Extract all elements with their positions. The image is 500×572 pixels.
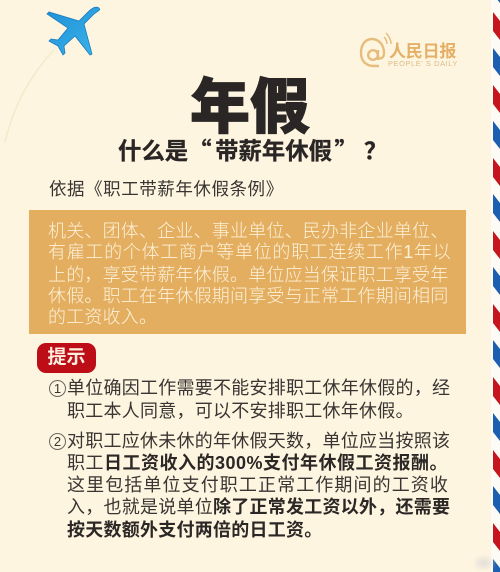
legal basis line: 依据《职工带薪年休假条例》 <box>49 179 284 199</box>
logo: People's Daily <box>360 32 458 68</box>
badge: tip <box>37 343 96 373</box>
note 1 <box>49 378 450 421</box>
note 2: 这里包括单位支付职工正常工作期间的工资收 <box>67 475 449 495</box>
title: 年假 <box>190 74 310 141</box>
icon: airplane <box>46 6 100 56</box>
paper smudge <box>476 558 492 568</box>
definition text <box>48 221 451 327</box>
logo at-sign icon <box>360 32 392 68</box>
note 1: 单位确因工作需要不能安排职工休年休假的，经 <box>67 378 450 398</box>
definition text: 机关、团体、企业、事业单位、民办非企业单位、 <box>48 221 448 241</box>
definition text: 有雇工的个体工商户等单位的职工连续工作1年以 <box>48 242 451 262</box>
flight trail <box>4 50 54 143</box>
panel: definition <box>29 210 466 334</box>
number 2: 2 <box>54 434 61 449</box>
note 2: 对职工应休未休的年休假天数，单位应当按照该 <box>67 431 450 451</box>
airmail stripe border <box>491 0 500 572</box>
number 1: 1 <box>54 381 61 396</box>
definition text: 的工资收入。 <box>48 307 157 327</box>
logo english: PEOPLE' S DAILY <box>388 59 458 68</box>
note 2: 按天数额外支付两倍的日工资。 <box>67 520 322 540</box>
badge: tip: 提示 <box>47 347 86 368</box>
logo wordmark: 人民日报 <box>389 42 456 61</box>
definition text: 上的，享受带薪年休假。单位应当保证职工享受年 <box>48 265 448 285</box>
number 2 <box>49 433 66 450</box>
note 2: 职工日工资收入的300%支付年休假工资报酬。 <box>67 453 448 473</box>
note 1: 职工本人同意，可以不安排职工休年休假。 <box>67 401 414 421</box>
number 1 <box>49 380 66 397</box>
note 2 <box>49 431 450 540</box>
note 2: 入，也就是说单位除了正常发工资以外，还需要 <box>67 497 450 517</box>
definition text: 休假。职工在年休假期间享受与正常工作期间相同 <box>48 286 448 306</box>
subtitle: 什么是“带薪年休假”？ <box>118 132 387 166</box>
